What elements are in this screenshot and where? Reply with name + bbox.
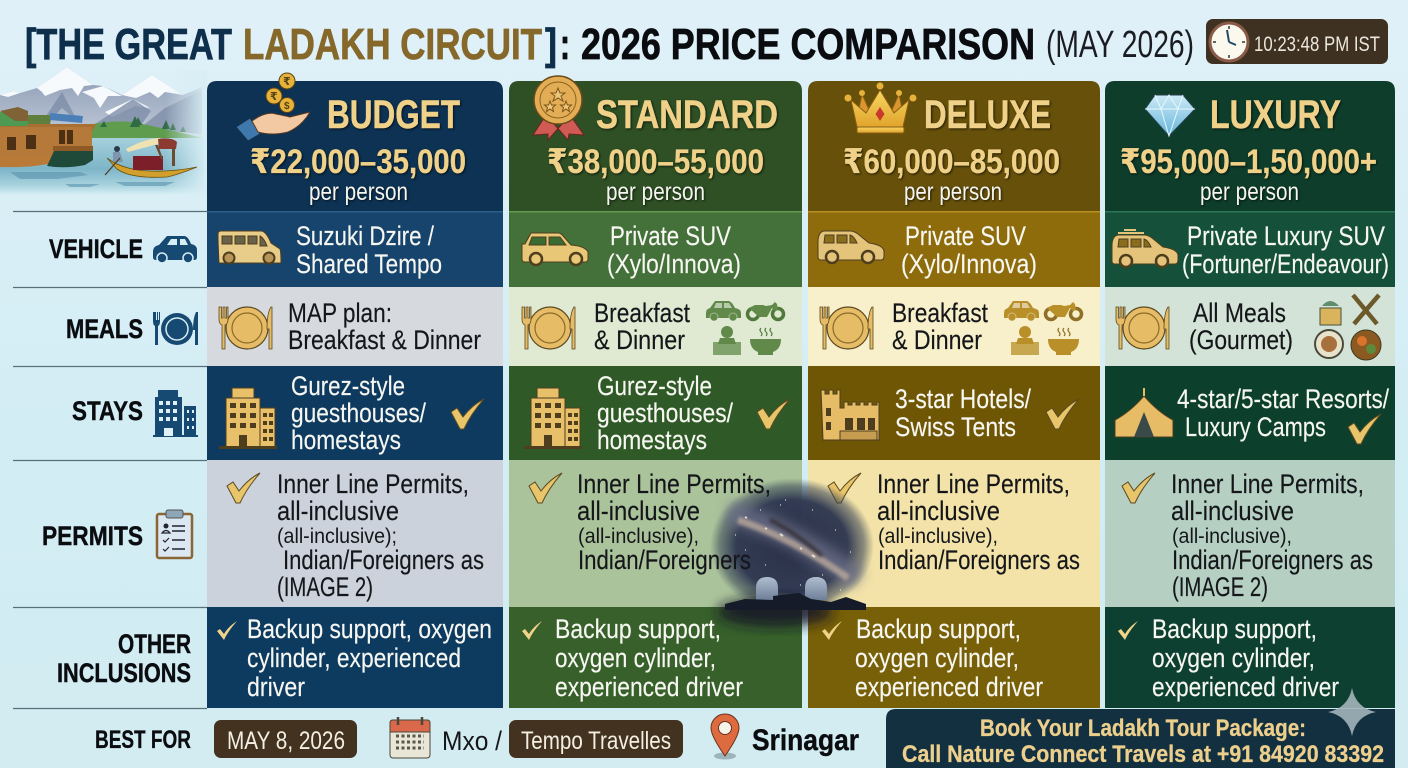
budget stays cell: guesthouses/	[291, 398, 426, 428]
row label: permits	[42, 510, 192, 558]
icon: sparkle	[1328, 688, 1376, 736]
deluxe vehicle cell: Private SUV	[905, 221, 1026, 251]
standard inclusions cell	[509, 607, 802, 708]
footer: best for label: BEST FOR	[95, 726, 191, 754]
standard stays cell: Gurez-style	[597, 371, 712, 401]
footer: date pill: MAY 8, 2026	[227, 727, 345, 755]
icon: check	[822, 621, 842, 640]
budget permits cell: all-inclusive	[277, 496, 399, 526]
deluxe inclusions cell	[808, 607, 1100, 708]
luxury permits cell: (all-inclusive),	[1172, 525, 1292, 548]
row label: vehicle: VEHICLE	[49, 234, 143, 264]
deluxe stays cell	[808, 366, 1100, 460]
luxury meals cell: All Meals	[1193, 298, 1286, 328]
icon: hand with coins: ₹	[270, 91, 278, 103]
budget header	[207, 73, 503, 211]
call to action banner	[886, 709, 1395, 768]
standard inclusions cell: experienced driver	[555, 672, 743, 702]
illustration: Kashmir lake with houseboat and shikara	[0, 67, 207, 196]
call to action banner: Book Your Ladakh Tour Package:	[980, 715, 1306, 742]
row label: meals: MEALS	[66, 314, 143, 344]
budget vehicle cell	[207, 211, 503, 287]
clock badge: 10:23:48 PM IST	[1254, 33, 1380, 56]
luxury stays cell: Luxury Camps	[1185, 412, 1326, 442]
panel: standard column	[509, 76, 802, 708]
icon: hand with coins: ₹	[283, 76, 291, 88]
deluxe permits text: (all-inclusive),	[878, 525, 998, 548]
icon: plate	[820, 307, 873, 349]
icon: car, bike, guide and meal	[1004, 301, 1082, 355]
row label: other inclusions	[57, 629, 191, 688]
luxury meals cell	[1105, 287, 1395, 366]
icon: plate	[1116, 307, 1169, 349]
standard meals cell	[509, 287, 802, 366]
luxury meals cell: (Gourmet)	[1189, 325, 1293, 355]
budget stays cell: Gurez-style	[291, 371, 405, 401]
deluxe header: DELUXE	[924, 93, 1051, 137]
luxury permits cell: Inner Line Permits,	[1171, 469, 1364, 499]
icon: check	[529, 473, 562, 503]
standard vehicle cell	[509, 211, 802, 287]
luxury header: LUXURY	[1210, 93, 1341, 137]
deluxe inclusions cell: oxygen cylinder,	[855, 643, 1019, 673]
deluxe vehicle cell	[808, 211, 1100, 287]
luxury permits cell: (IMAGE 2)	[1172, 572, 1268, 602]
luxury header	[1105, 81, 1395, 211]
icon: check	[1348, 414, 1381, 444]
standard permits text	[577, 469, 771, 575]
title: [THE GREAT	[25, 20, 232, 69]
budget stays cell: homestays	[291, 425, 401, 455]
standard vehicle cell: (Xylo/Innova)	[607, 249, 741, 279]
standard meals cell: & Dinner	[594, 325, 685, 355]
image: milky way over observatory	[710, 478, 874, 627]
footer: date pill	[214, 720, 357, 758]
icon: map pin	[711, 714, 739, 760]
row label: stays	[72, 390, 198, 437]
deluxe stays cell: 3-star Hotels/	[895, 384, 1031, 414]
budget permits cell: Indian/Foreigners as	[283, 545, 484, 575]
standard inclusions cell: Backup support,	[555, 614, 721, 644]
icon: check	[451, 399, 484, 429]
standard header: ₹38,000–55,000	[547, 143, 764, 181]
luxury inclusions cell: Backup support,	[1152, 614, 1317, 644]
deluxe permits cell	[808, 460, 1100, 607]
title: 2026 PRICE COMPARISON	[581, 20, 1035, 69]
icon: car	[153, 236, 197, 263]
budget stays cell	[207, 366, 503, 460]
icon: luxury SUV	[1112, 230, 1178, 267]
title: (MAY 2026)	[1046, 24, 1194, 66]
deluxe permits text: Inner Line Permits,	[877, 469, 1070, 499]
icon: check	[757, 399, 790, 429]
icon: crown	[844, 82, 916, 133]
deluxe header	[808, 81, 1100, 211]
icon: SUV	[522, 233, 588, 265]
luxury vehicle cell	[1105, 211, 1395, 287]
footer: vehicle text: Mxo /	[442, 726, 502, 756]
icon: hand with coins: $	[284, 101, 290, 112]
budget header: ₹22,000–35,000	[250, 143, 466, 181]
title: LADAKH CIRCUIT	[243, 20, 542, 69]
icon: tempo van	[218, 231, 281, 264]
standard permits text: Inner Line Permits,	[577, 469, 771, 499]
standard stays cell: homestays	[597, 425, 707, 455]
standard vehicle cell: Private SUV	[610, 221, 731, 251]
icon: clipboard	[157, 510, 192, 558]
icon: calendar	[390, 717, 430, 758]
luxury permits cell	[1105, 460, 1395, 607]
icon: hotel	[219, 388, 277, 449]
standard inclusions cell: oxygen cylinder,	[555, 643, 716, 673]
icon: check	[227, 473, 260, 503]
footer: tempo pill: Tempo Travelles	[521, 727, 671, 755]
title	[25, 20, 1194, 69]
budget permits cell: Inner Line Permits,	[277, 469, 469, 499]
icon: plate and cutlery	[153, 312, 198, 345]
budget vehicle cell: Shared Tempo	[296, 249, 442, 279]
clock badge	[1206, 19, 1388, 64]
icon: check	[522, 621, 542, 640]
icon: gourmet food set	[1315, 295, 1381, 360]
standard header: per person	[606, 178, 705, 206]
deluxe vehicle cell: (Xylo/Innova)	[901, 249, 1037, 279]
standard permits cell	[509, 460, 802, 607]
icon: car, bike, guide and meal	[706, 301, 784, 355]
icon: diamond	[1145, 95, 1195, 136]
budget meals cell: MAP plan:	[288, 298, 392, 328]
standard meals cell: Breakfast	[594, 298, 690, 328]
budget header: per person	[309, 178, 408, 206]
budget vehicle cell: Suzuki Dzire /	[296, 221, 434, 251]
luxury inclusions cell: oxygen cylinder,	[1152, 643, 1315, 673]
icon: check	[1118, 621, 1138, 640]
deluxe permits text	[877, 469, 1080, 575]
luxury inclusions cell	[1105, 607, 1395, 708]
standard stays cell: guesthouses/	[597, 398, 733, 428]
standard stays cell	[509, 366, 802, 460]
deluxe meals cell: & Dinner	[892, 325, 982, 355]
luxury inclusions cell: experienced driver	[1152, 672, 1339, 702]
budget permits cell: (IMAGE 2)	[277, 572, 373, 602]
standard permits text: Indian/Foreigners	[578, 545, 751, 575]
deluxe inclusions cell: Backup support,	[856, 614, 1021, 644]
icon: SUV	[818, 231, 884, 263]
icon: check	[828, 473, 861, 503]
icon: fort hotel	[821, 390, 879, 440]
title: ]	[545, 20, 557, 69]
standard header	[509, 76, 802, 211]
row label: meals	[66, 312, 198, 345]
luxury permits cell: all-inclusive	[1171, 496, 1294, 526]
shikara	[105, 138, 197, 177]
icon: check	[1046, 399, 1079, 429]
row label: stays: STAYS	[72, 396, 143, 426]
icon: plate	[219, 307, 272, 349]
icon: check	[1122, 473, 1155, 503]
panel: deluxe column	[808, 81, 1100, 708]
standard header: STANDARD	[596, 93, 778, 137]
budget header: BUDGET	[327, 93, 460, 137]
icon: medal	[533, 76, 584, 140]
icon: check	[217, 621, 237, 640]
houseboat	[0, 107, 96, 167]
title: :	[560, 20, 570, 69]
budget permits cell: (all-inclusive);	[277, 525, 397, 548]
icon: hand with coins	[236, 73, 310, 141]
budget permits cell	[207, 460, 503, 607]
budget inclusions cell	[207, 607, 503, 708]
deluxe permits text: all-inclusive	[877, 496, 1000, 526]
icon: plate	[522, 307, 575, 349]
budget inclusions cell: cylinder, experienced	[247, 643, 461, 673]
panel: luxury column	[1105, 81, 1395, 708]
footer: tempo pill	[509, 720, 683, 758]
icon: hotel	[153, 390, 198, 437]
deluxe meals cell: Breakfast	[892, 298, 988, 328]
row label: other inclusions: OTHER	[118, 629, 191, 659]
row label: permits: PERMITS	[42, 521, 143, 551]
deluxe permits text: Indian/Foreigners as	[878, 545, 1080, 575]
deluxe meals cell	[808, 287, 1100, 366]
budget inclusions cell: Backup support, oxygen	[247, 614, 492, 644]
deluxe header: ₹60,000–85,000	[843, 143, 1060, 181]
luxury stays cell	[1105, 366, 1395, 460]
panel: budget column	[207, 73, 503, 708]
budget inclusions cell: driver	[247, 672, 305, 702]
row dividers	[13, 212, 207, 708]
standard permits text: (all-inclusive),	[578, 525, 699, 548]
icon: hotel	[524, 388, 582, 449]
standard permits text: all-inclusive	[577, 496, 700, 526]
budget meals cell: Breakfast & Dinner	[288, 325, 481, 355]
deluxe header: per person	[904, 178, 1002, 206]
icon: clock	[1210, 23, 1248, 61]
deluxe inclusions cell: experienced driver	[855, 672, 1043, 702]
icon: tent	[1115, 388, 1173, 437]
row label: other inclusions: INCLUSIONS	[57, 658, 191, 688]
footer: location: Srinagar	[752, 724, 859, 757]
luxury header: per person	[1200, 178, 1299, 206]
deluxe stays cell: Swiss Tents	[895, 412, 1016, 442]
budget meals cell	[207, 287, 503, 366]
